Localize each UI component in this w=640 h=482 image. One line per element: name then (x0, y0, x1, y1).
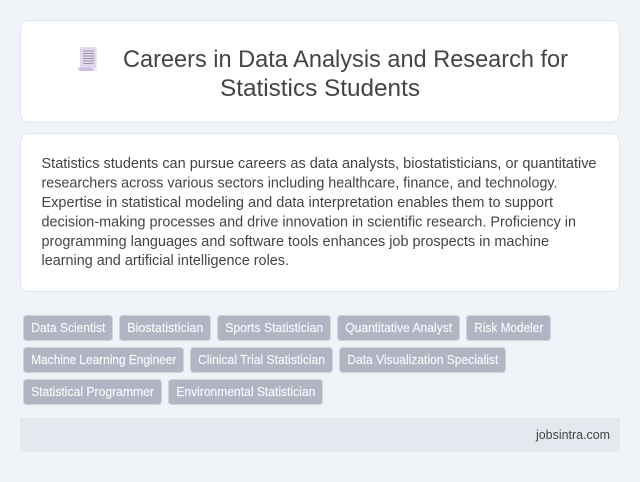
tag: Data Visualization Specialist (340, 348, 506, 372)
tag: Data Scientist: Data Scientist (31, 321, 106, 335)
description text: researchers across various sectors including healthcare, finance, and technology. (42, 176, 558, 192)
tag: Quantitative Analyst: Quantitative Analyst (345, 321, 453, 335)
tag: Data Scientist (24, 316, 112, 340)
footer bar (20, 418, 620, 452)
description text: Statistics students can pursue careers as data analysts, biostatisticians, or quantitative (42, 156, 596, 172)
tag: Clinical Trial Statistician: Clinical Trial Statistician (198, 353, 325, 367)
description text: Expertise in statistical modeling and data interpretation enables them to support (42, 195, 553, 211)
tag: Sports Statistician (218, 316, 330, 340)
tag list (24, 316, 550, 404)
panel: description (20, 134, 620, 292)
description text: decision-making processes and drive innovation in scientific research. Proficiency in (42, 214, 576, 230)
tag: Data Visualization Specialist: Data Visualization Specialist (347, 353, 499, 367)
tag: Clinical Trial Statistician (190, 348, 332, 372)
description text (42, 156, 596, 269)
tag: Environmental Statistician (168, 380, 322, 404)
heading: Careers in Data Analysis and Research for (123, 46, 568, 73)
tag: Environmental Statistician: Environmental Statistician (176, 385, 315, 399)
tag: Biostatistician (120, 316, 210, 340)
tag: Risk Modeler: Risk Modeler (474, 321, 543, 335)
tag: Machine Learning Engineer: Machine Learning Engineer (31, 353, 176, 367)
tag: Quantitative Analyst (338, 316, 460, 340)
heading: Statistics Students (220, 75, 420, 102)
panel: title card (20, 20, 620, 122)
heading (123, 46, 568, 102)
footer source text: jobsintra.com (535, 428, 610, 442)
description text: learning and artificial intelligence roles. (42, 253, 289, 269)
tag: Biostatistician: Biostatistician (127, 321, 203, 335)
tag: Statistical Programmer: Statistical Programmer (31, 385, 154, 399)
description text: programming languages and software tools enhances job prospects in machine (42, 234, 549, 250)
tag: Sports Statistician: Sports Statistician (225, 321, 323, 335)
tag: Machine Learning Engineer (24, 348, 184, 372)
icon: receipt scroll (78, 47, 97, 71)
tag: Statistical Programmer (24, 380, 162, 404)
tag: Risk Modeler (466, 316, 550, 340)
